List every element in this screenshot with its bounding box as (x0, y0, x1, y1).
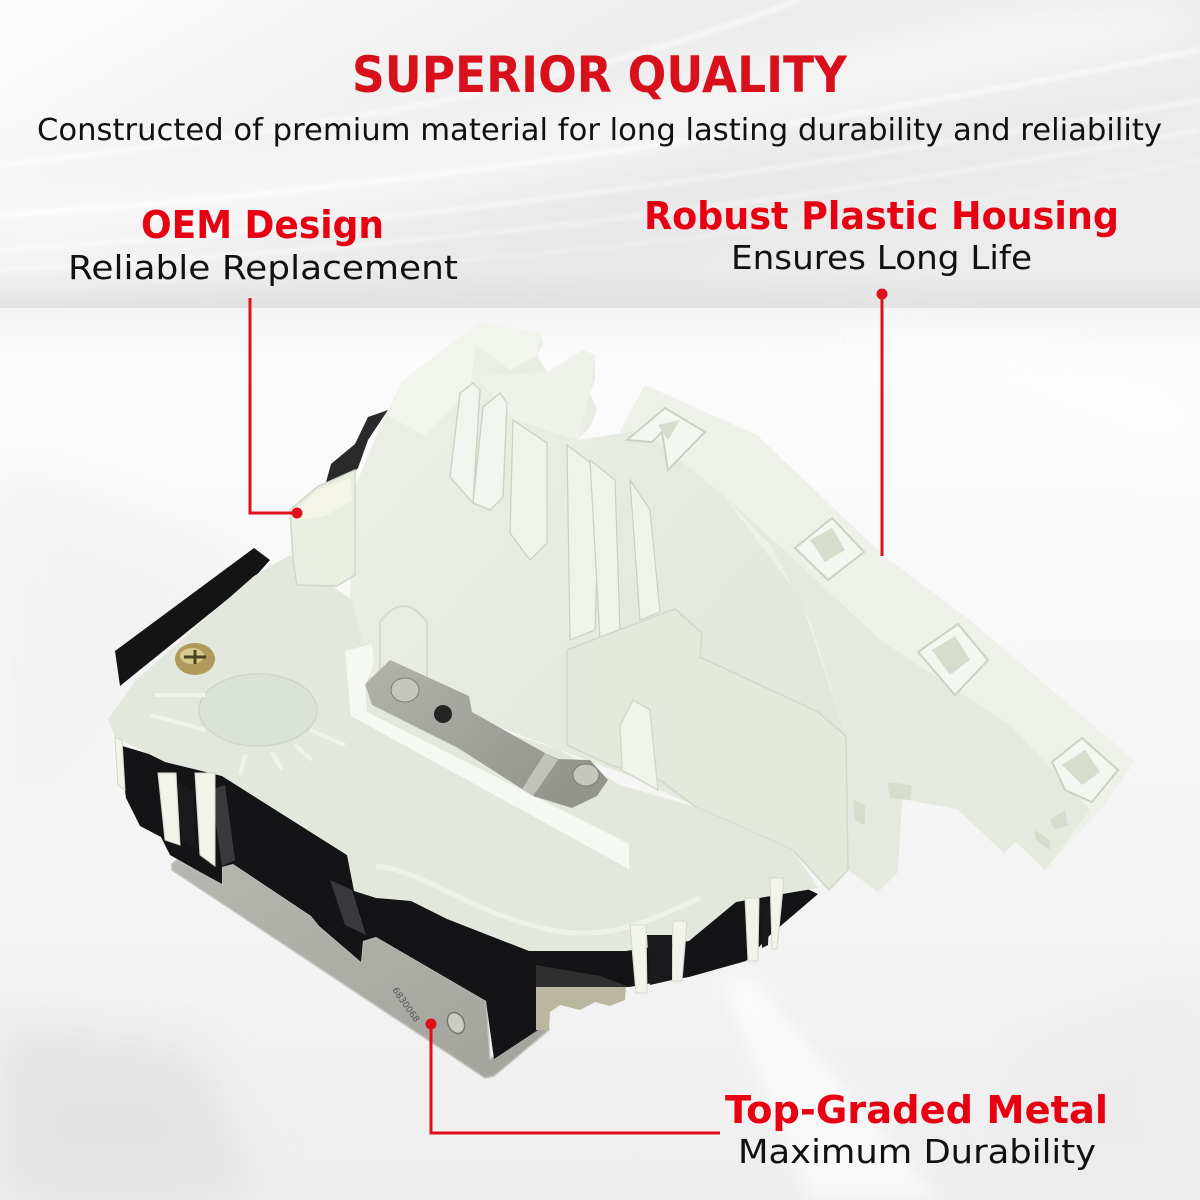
callout: OEM design: OEM Design (141, 203, 384, 247)
connector (290, 470, 355, 586)
connector opening (292, 478, 352, 520)
housing ribs (510, 420, 660, 640)
black lower body (119, 745, 818, 1059)
clip slots (627, 408, 1118, 802)
leader line: OEM design (250, 298, 301, 517)
top block highlight (388, 322, 540, 436)
callout: top-graded metal: Maximum Durability (738, 1132, 1096, 1171)
callout: robust plastic housing (644, 194, 1119, 277)
title: SUPERIOR QUALITY (352, 46, 848, 104)
wing lower face (723, 495, 1090, 892)
plate hole (444, 1010, 468, 1036)
subtitle: Constructed of premium material for long lasting durability and reliability (37, 113, 1162, 148)
screw (175, 643, 215, 675)
black side bar (115, 548, 270, 686)
callout: OEM design (68, 203, 458, 287)
callout: top-graded metal: Top-Graded Metal (725, 1088, 1108, 1132)
callout: robust plastic housing: Robust Plastic Housing (644, 194, 1119, 238)
round cap (199, 674, 317, 746)
metal lever (365, 660, 608, 808)
metal bottom plate (172, 860, 549, 1078)
base clips (115, 737, 784, 993)
metal plate marking: 6830068 (390, 986, 421, 1025)
lower front panel (567, 609, 848, 890)
black rear tab (325, 410, 388, 490)
central upright housing (350, 322, 848, 890)
white strip (345, 644, 629, 869)
wing housing (620, 385, 1135, 892)
slot holes (658, 420, 1100, 850)
vertical post (620, 700, 658, 790)
central face arch (380, 606, 427, 700)
housing posts (450, 383, 507, 510)
callout: top-graded metal (725, 1088, 1108, 1171)
callout: robust plastic housing: Ensures Long Life (731, 238, 1032, 277)
side window details (211, 785, 629, 987)
product: door lock actuator (108, 322, 1135, 1078)
leader line: plastic housing (878, 290, 886, 556)
base top surface (108, 555, 818, 951)
base surface fold (376, 866, 700, 933)
latch teeth (536, 987, 626, 1030)
cap ribs (150, 695, 345, 775)
callout: OEM design: Reliable Replacement (68, 248, 458, 287)
black windows (177, 782, 770, 985)
leader line: metal (427, 1020, 720, 1133)
